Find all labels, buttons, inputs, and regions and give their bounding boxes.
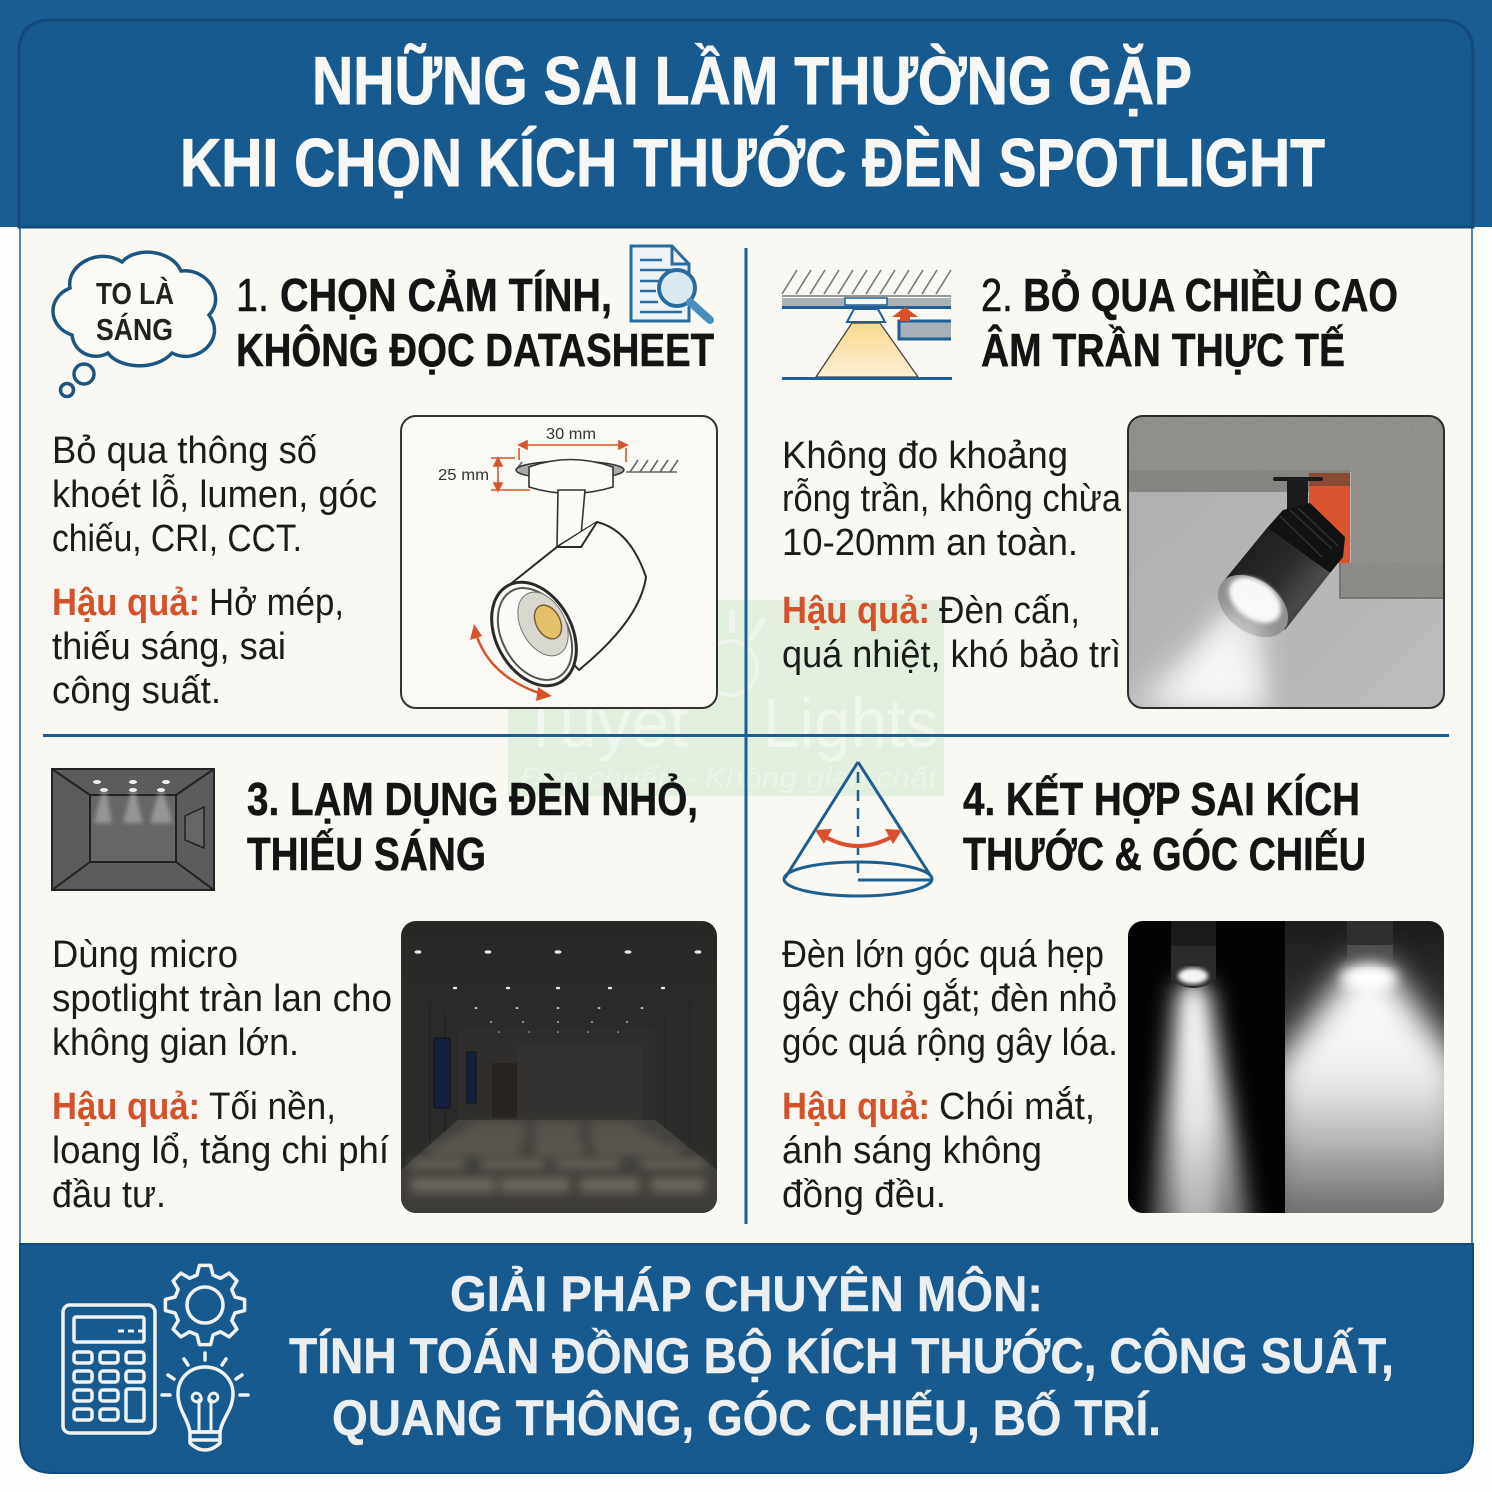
body text: Hậu quả: — [782, 1086, 930, 1128]
body text: Bỏ qua thông số — [52, 430, 317, 472]
icon: calculator — [63, 1305, 155, 1433]
body text: đầu tư. — [52, 1174, 166, 1216]
heading — [247, 773, 698, 880]
body text: Dùng micro — [52, 934, 238, 976]
solution text — [289, 1265, 1394, 1446]
heading: KHÔNG ĐỌC DATASHEET — [236, 324, 714, 376]
watermark: Lights — [763, 684, 938, 762]
heading: 3. LẠM DỤNG ĐÈN NHỎ, — [247, 773, 698, 825]
solution text: GIẢI PHÁP CHUYÊN MÔN: — [450, 1265, 1043, 1322]
body text: Hậu quả: — [52, 1086, 200, 1128]
body text: đồng đều. — [782, 1174, 946, 1216]
photo: dim room — [401, 921, 717, 1213]
dimension labels: 25 mm — [438, 467, 489, 484]
heading: ÂM TRẦN THỰC TẾ — [981, 324, 1345, 376]
body text: Tối nền, — [209, 1086, 336, 1128]
photo: narrow vs wide beam — [1128, 921, 1444, 1213]
body text: góc quá rộng gây lóa. — [782, 1022, 1118, 1064]
heading — [981, 269, 1398, 376]
body text — [52, 934, 392, 1216]
icon: gear — [165, 1265, 245, 1345]
right lamp and wide beam — [1285, 921, 1444, 1213]
icon: light bulb — [162, 1353, 248, 1450]
body text — [782, 934, 1118, 1216]
body text: 10-20mm an toàn. — [782, 522, 1078, 564]
title — [180, 42, 1325, 201]
body text: Chói mắt, — [939, 1085, 1095, 1128]
body text: loang lổ, tăng chi phí — [52, 1130, 389, 1172]
icon: datasheet and magnifier — [631, 246, 710, 321]
diagram: spotlight dimensions — [401, 416, 717, 708]
panel 1: datasheet — [52, 246, 717, 712]
dimension labels: 30 mm — [546, 426, 596, 443]
icon: recess section — [782, 270, 952, 378]
heading: THƯỚC & GÓC CHIẾU — [963, 828, 1366, 880]
icon: thought cloud: SÁNG — [96, 312, 173, 347]
icon: thought cloud — [53, 252, 216, 396]
body text: Đèn lớn góc quá hẹp — [782, 934, 1104, 976]
content card background — [20, 220, 1472, 1250]
solution text: TÍNH TOÁN ĐỒNG BỘ KÍCH THƯỚC, CÔNG SUẤT, — [289, 1327, 1394, 1384]
body text: Không đo khoảng — [782, 435, 1068, 477]
heading: 1. CHỌN CẢM TÍNH, — [236, 269, 612, 321]
body text: Hậu quả: — [782, 590, 930, 632]
header band — [0, 0, 1492, 227]
body text: thiếu sáng, sai — [52, 626, 286, 668]
body text: chiếu, CRI, CCT. — [52, 518, 302, 560]
panel 4: size and beam angle — [782, 761, 1444, 1215]
photo border — [1128, 416, 1444, 708]
heading: 2. BỎ QUA CHIỀU CAO — [981, 269, 1398, 321]
solution text: QUANG THÔNG, GÓC CHIẾU, BỐ TRÍ. — [332, 1389, 1161, 1446]
body text — [782, 435, 1122, 676]
heading: THIẾU SÁNG — [247, 828, 486, 880]
body text: khoét lỗ, lumen, góc — [52, 473, 377, 516]
body text: ánh sáng không — [782, 1130, 1042, 1172]
dividers — [43, 248, 1449, 1224]
body text: rỗng trần, không chừa — [782, 477, 1122, 520]
icon: thought cloud: TO LÀ — [96, 276, 174, 311]
watermark: Tuyết — [520, 684, 688, 762]
heading — [236, 269, 714, 376]
body text: quá nhiệt, khó bảo trì — [782, 634, 1121, 676]
body text: spotlight tràn lan cho — [52, 978, 392, 1020]
body text — [52, 430, 377, 712]
heading — [963, 773, 1366, 880]
body text: Hở mép, — [209, 582, 344, 624]
panel 2: ceiling height — [782, 269, 1444, 708]
icon: beam cone — [784, 762, 932, 896]
body text: Hậu quả: — [52, 582, 200, 624]
body text: gây chói gắt; đèn nhỏ — [782, 977, 1117, 1020]
panel 3: small lights — [52, 769, 717, 1216]
heading: 4. KẾT HỢP SAI KÍCH — [963, 773, 1360, 825]
watermark: Đèn chuẩn - Không gian chất — [520, 762, 938, 793]
dimension labels — [438, 426, 596, 484]
left lamp and narrow beam — [1128, 921, 1285, 1240]
photo: spotlight in recess — [1128, 416, 1444, 708]
icon: dim room — [52, 769, 214, 890]
body text: Đèn cấn, — [939, 590, 1080, 632]
footer band — [20, 1244, 1473, 1473]
body text: công suất. — [52, 670, 221, 712]
body text: không gian lớn. — [52, 1022, 299, 1064]
watermark — [508, 600, 944, 796]
title: NHỮNG SAI LẦM THƯỜNG GẶP — [312, 42, 1192, 119]
